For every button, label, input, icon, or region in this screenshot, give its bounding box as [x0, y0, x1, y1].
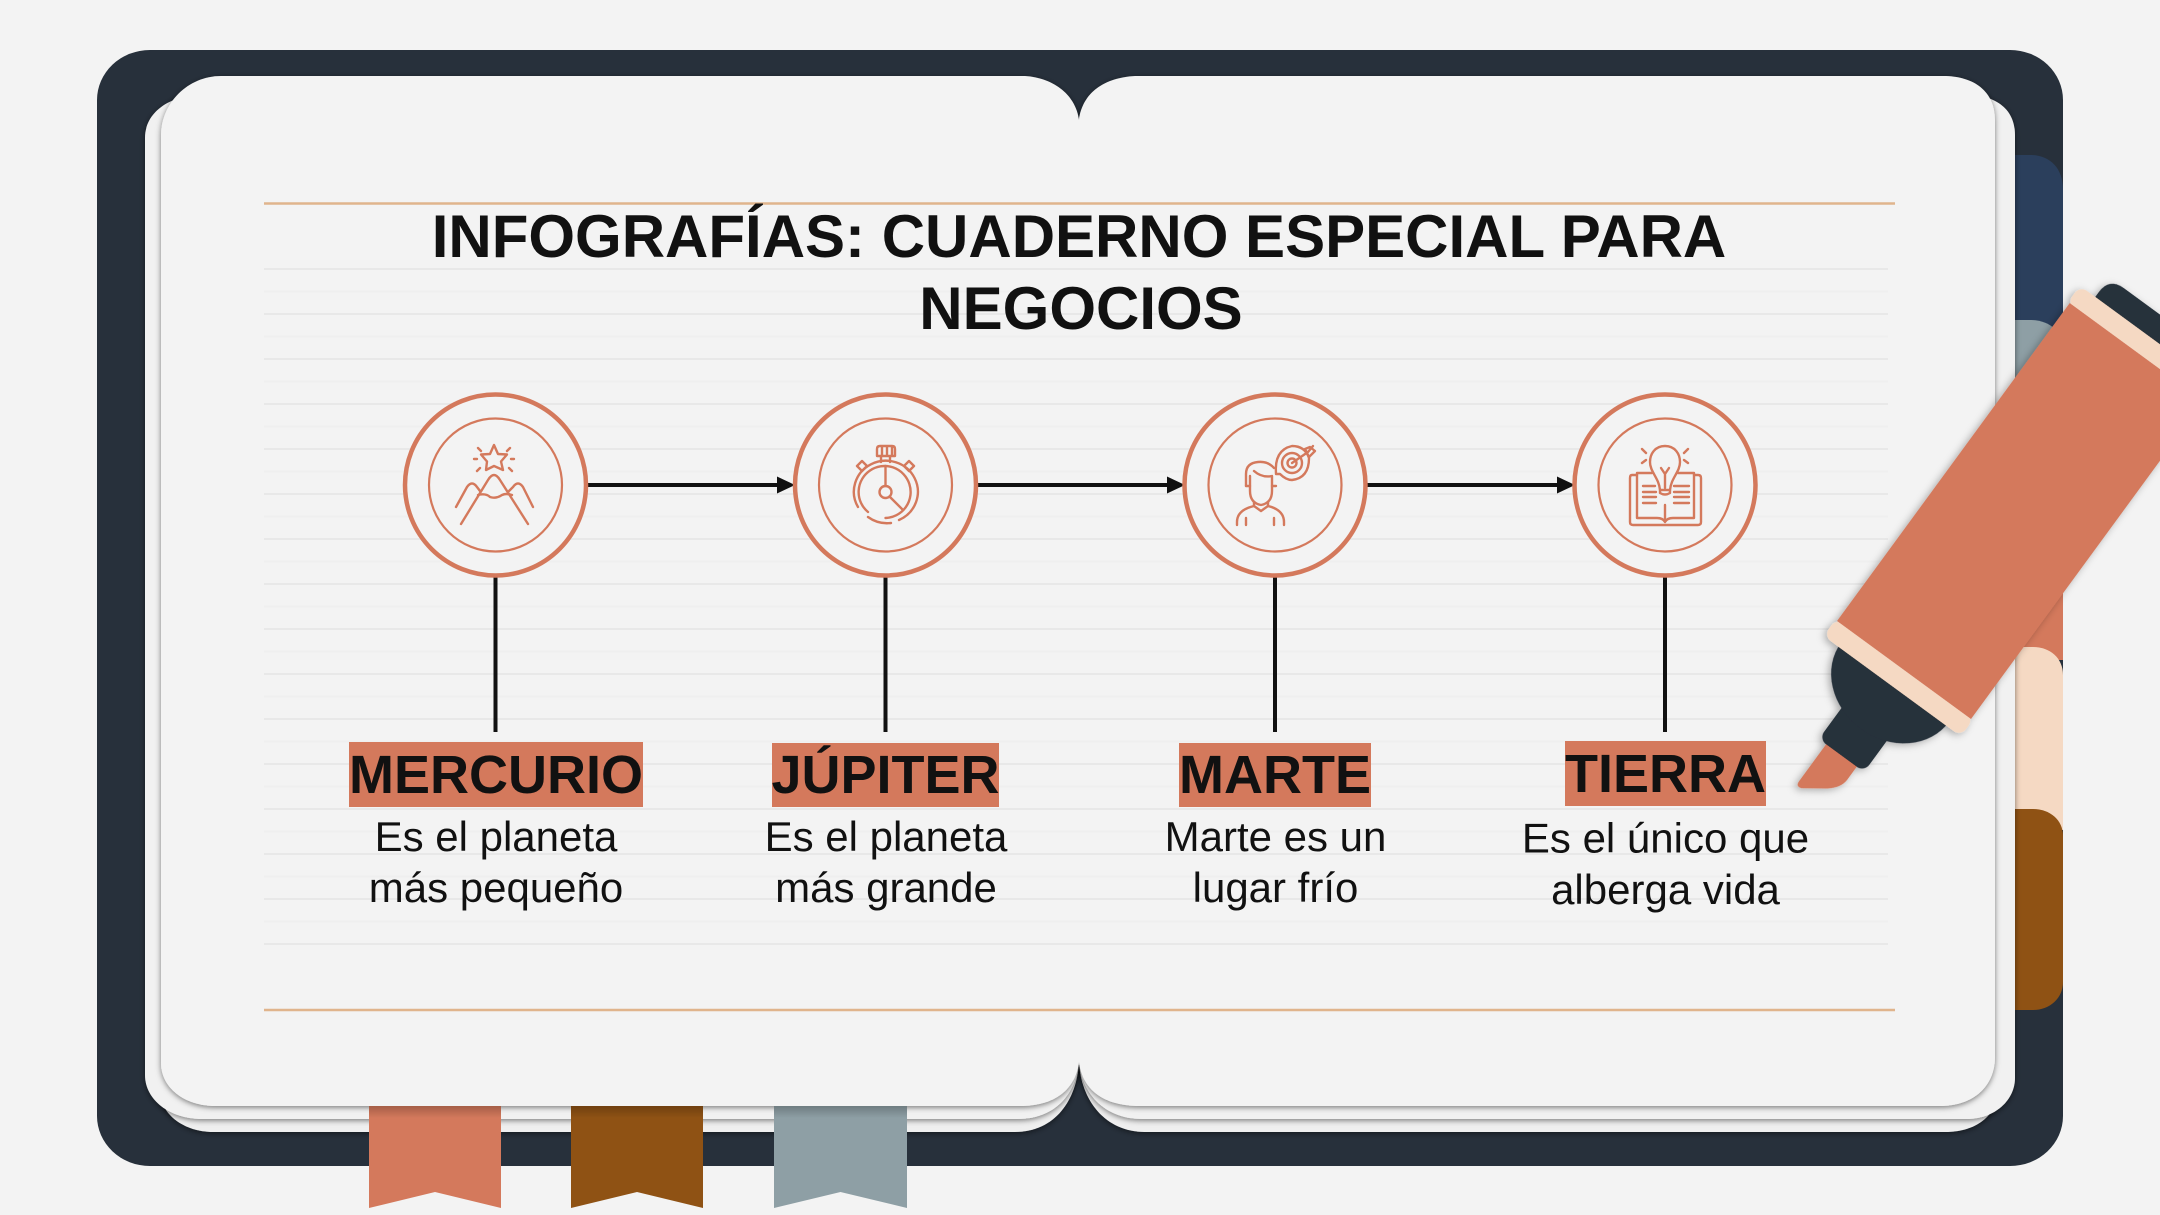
title: [432, 203, 1726, 342]
description: Tierra: [1522, 814, 1809, 913]
tab: brown: [2000, 809, 2063, 1010]
middle page layer: [145, 94, 2015, 1119]
marker body: [1837, 303, 2160, 719]
label: Tierra: TIERRA: [1565, 744, 1766, 804]
marker end cap: [2090, 278, 2160, 382]
arrow 3: [1367, 476, 1575, 494]
tab: grey: [2000, 320, 2063, 500]
title: INFOGRAFÍAS: CUADERNO ESPECIAL PARA: [432, 203, 1726, 270]
connector arrows: [588, 476, 1575, 494]
description: Júpiter: Es el planeta: [765, 813, 1008, 860]
top page: [161, 76, 1995, 1106]
arrow 2: [978, 476, 1185, 494]
description: Tierra: alberga vida: [1551, 866, 1781, 913]
label: Júpiter: JÚPITER: [771, 745, 1000, 805]
description: Mercurio: Es el planeta: [375, 813, 618, 860]
vertical connectors: [496, 576, 1665, 732]
step 2: Júpiter: [765, 394, 1008, 911]
marker collar: [1807, 643, 1949, 768]
label: Mercurio: MERCURIO: [349, 745, 643, 805]
icon: stopwatch: [795, 394, 976, 576]
marker neck: [1819, 698, 1894, 772]
bookmarks: [369, 1106, 907, 1208]
tab: terracotta: [2000, 480, 2063, 660]
step 1: Mercurio: [349, 394, 643, 911]
highlighter marker: [1743, 266, 2160, 846]
icon: book with light bulb: [1574, 394, 1756, 576]
description: Marte: [1165, 813, 1386, 911]
icon: mountain with star: [405, 394, 586, 576]
bookmark: terracotta: [369, 1106, 501, 1208]
page layers: [145, 76, 2015, 1132]
step 4: Tierra: [1522, 394, 1809, 913]
icon: person with target: [1184, 394, 1366, 576]
description: Mercurio: [369, 813, 623, 911]
description: Júpiter: [765, 813, 1008, 911]
bookmark: brown: [571, 1106, 703, 1208]
tab: navy: [2000, 155, 2063, 330]
step 3: Marte: [1165, 394, 1386, 911]
bookmark: grey: [774, 1106, 907, 1208]
title: NEGOCIOS: [919, 275, 1243, 342]
marker tip: [1796, 739, 1860, 808]
description: Marte: Marte es un: [1165, 813, 1386, 860]
side tabs: [2000, 155, 2063, 1010]
arrow 1: [588, 476, 795, 494]
description: Marte: lugar frío: [1193, 864, 1358, 911]
tab: peach: [2000, 647, 2063, 830]
marker bands: [1824, 618, 1974, 736]
description: Tierra: Es el único que: [1522, 814, 1809, 862]
bottom page layer: [160, 96, 1998, 1132]
description: Mercurio: más pequeño: [369, 864, 623, 911]
label: Marte: MARTE: [1179, 745, 1371, 805]
description: Júpiter: más grande: [775, 864, 997, 911]
